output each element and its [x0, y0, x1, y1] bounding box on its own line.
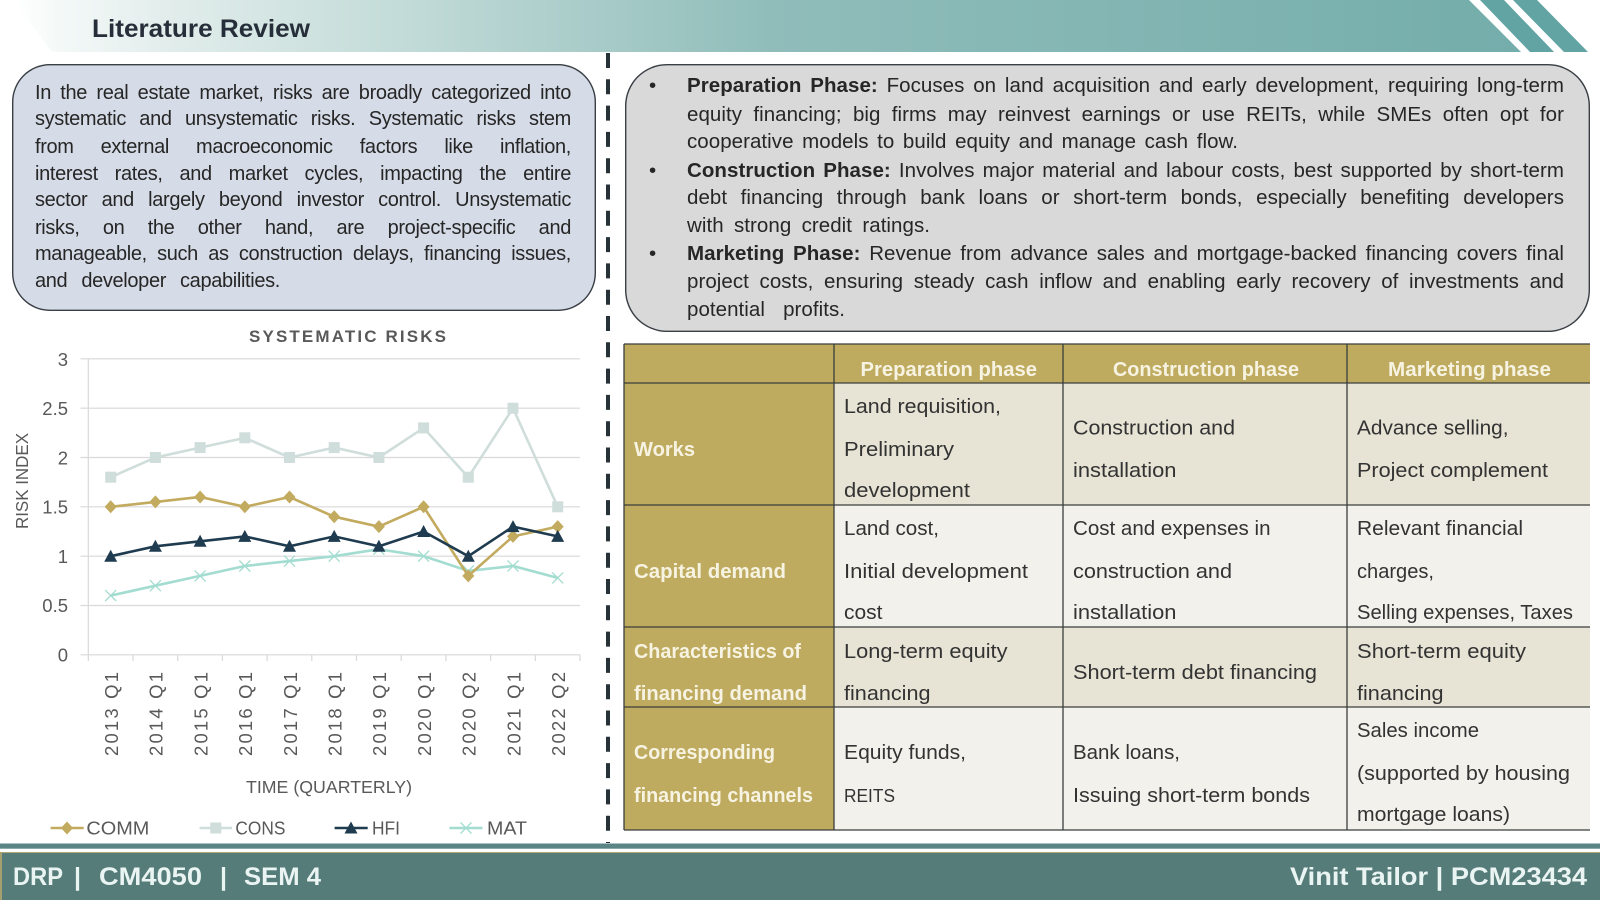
- table row labels: Characteristics of: [634, 641, 801, 663]
- panel: risk categories: risks, on the other hand, are project-specific and: [35, 216, 571, 238]
- x axis tick labels: 2014 Q1: [146, 672, 167, 756]
- y axis tick labels: [42, 349, 68, 666]
- table column: marketing phase: mortgage loans): [1357, 804, 1510, 826]
- table column: preparation phase: Initial development: [844, 561, 1028, 583]
- table column: preparation phase: Equity funds,: [844, 742, 966, 764]
- financing table: [624, 344, 1590, 830]
- x axis title: TIME (QUARTERLY): [246, 777, 412, 797]
- table column: marketing phase: financing: [1357, 683, 1444, 705]
- x axis tick labels: [101, 672, 569, 756]
- header stripe 2: [1513, 0, 1588, 52]
- x axis tick labels: 2020 Q1: [414, 672, 435, 756]
- table column: marketing phase: Short-term equity: [1357, 641, 1526, 663]
- table column: marketing phase: (supported by housing: [1357, 763, 1570, 785]
- x axis tick labels: 2022 Q2: [548, 672, 569, 756]
- panel: risk categories: systematic and unsystematic risks. Systematic risks stem: [35, 108, 571, 130]
- panel: risk categories: [12, 64, 596, 311]
- x axis tick labels: 2013 Q1: [101, 672, 122, 756]
- panel: risk categories: manageable, such as construction delays, financing issues,: [35, 243, 571, 265]
- table column: construction phase: installation: [1073, 460, 1176, 482]
- table column: preparation phase: Land requisition,: [844, 396, 1001, 418]
- y axis tick labels: 0: [58, 644, 68, 666]
- table row labels: Works: [634, 439, 695, 461]
- footer left text: [13, 863, 321, 891]
- table column: preparation phase: Land cost,: [844, 518, 939, 540]
- panel: project phases: with strong credit ratings.: [687, 214, 930, 236]
- y axis tick labels: 2: [58, 448, 68, 468]
- y axis tick labels: 0.5: [42, 595, 68, 616]
- y axis tick labels: 3: [58, 349, 68, 370]
- line chart: systematic risks: [12, 327, 580, 838]
- panel: risk categories: from external macroeconomic factors like inflation,: [35, 136, 571, 158]
- legend: MAT: MAT: [487, 818, 527, 838]
- table column: preparation phase: Long-term equity: [844, 641, 1008, 663]
- table column: preparation phase: cost: [844, 602, 883, 624]
- table row labels: financing channels: [634, 785, 813, 807]
- x axis tick labels: 2016 Q1: [235, 672, 256, 756]
- footer left text: |: [220, 863, 227, 891]
- legend: HFI: HFI: [372, 818, 400, 838]
- series: CONS: [111, 408, 558, 507]
- series: HFI: [111, 527, 558, 556]
- table header row: [860, 359, 1551, 381]
- footer left text: DRP: [13, 863, 63, 891]
- panel: risk categories: In the real estate market, risks are broadly categorized into: [35, 82, 571, 104]
- panel: project phases: equity financing; big firms may reinvest earnings or use REITs, while SMEs often opt for: [687, 102, 1564, 126]
- table column: marketing phase: Project complement: [1357, 460, 1548, 482]
- y axis tick labels: 1: [58, 546, 68, 567]
- table column: preparation phase: financing: [844, 683, 930, 705]
- table header row: Preparation phase: [860, 359, 1037, 381]
- panel: risk categories: sector and largely beyond investor control. Unsystematic: [35, 189, 571, 211]
- table row labels: Corresponding: [634, 742, 775, 764]
- panel: project phases: cooperative models to build equity and manage cash flow.: [687, 130, 1238, 152]
- table column: construction phase: Issuing short-term bonds: [1073, 785, 1310, 807]
- table column: construction phase: construction and: [1073, 561, 1232, 583]
- table column: marketing phase: Selling expenses, Taxes: [1357, 602, 1573, 624]
- legend: MAT: [449, 818, 527, 838]
- panel: project phases: •: [649, 74, 656, 97]
- legend: HFI: [335, 818, 400, 838]
- legend: COMM: COMM: [86, 818, 149, 838]
- table column: construction phase: Cost and expenses in: [1073, 518, 1270, 540]
- panel: project phases: project costs, ensuring steady cash inflow and enabling early recovery of investments and: [687, 270, 1564, 292]
- panel: project phases: Preparation Phase: Focuses on land acquisition and early development, requiring long-term: [687, 74, 1564, 97]
- table column: marketing phase: Advance selling,: [1357, 418, 1508, 440]
- table column: construction phase: Short-term debt financing: [1073, 662, 1317, 684]
- series: MAT: [111, 549, 558, 596]
- footer left text: CM4050: [99, 863, 202, 891]
- title: Literature Review: [92, 15, 311, 43]
- header banner: [14, 0, 1588, 52]
- table column: preparation phase: REITS: [844, 785, 895, 806]
- panel: project phases: debt financing through bank loans or short-term bonds, especially benefiting developers: [687, 186, 1564, 208]
- table column: marketing phase: charges,: [1357, 561, 1434, 583]
- table header row: Marketing phase: [1388, 359, 1551, 381]
- y axis tick labels: 1.5: [42, 496, 68, 518]
- x axis tick labels: 2019 Q1: [369, 672, 390, 756]
- footer left text: |: [74, 863, 81, 891]
- panel: project phases: [625, 64, 1590, 332]
- table row labels: Capital demand: [634, 561, 786, 583]
- panel: project phases: •: [649, 242, 656, 265]
- footer bar: [0, 844, 1600, 900]
- table row labels: [634, 439, 813, 807]
- table column: marketing phase: Sales income: [1357, 720, 1479, 742]
- legend: CONS: CONS: [235, 818, 285, 838]
- panel: project phases: •: [649, 158, 656, 182]
- legend: CONS: [200, 818, 285, 838]
- table column: marketing phase: Relevant financial: [1357, 518, 1523, 540]
- x axis tick labels: 2018 Q1: [324, 672, 346, 756]
- legend: COMM: [51, 818, 149, 838]
- table column: marketing phase: [1357, 418, 1573, 826]
- panel: risk categories: and developer capabilities.: [35, 270, 280, 292]
- table header row: Construction phase: [1113, 359, 1299, 381]
- panel: project phases: Marketing Phase: Revenue from advance sales and mortgage-backed financing covers final: [687, 242, 1564, 265]
- table column: preparation phase: development: [844, 480, 970, 502]
- footer right text: Vinit Tailor | PCM23434: [1290, 863, 1587, 891]
- y axis tick labels: 2.5: [42, 398, 68, 419]
- x axis tick labels: 2021 Q1: [503, 672, 524, 756]
- legend: [51, 818, 527, 838]
- dashed divider: [606, 53, 610, 843]
- table row labels: financing demand: [634, 683, 807, 705]
- panel: project phases: potential profits.: [687, 298, 845, 321]
- header stripe 1: [1480, 0, 1554, 52]
- panel: project phases: Construction Phase: Involves major material and labour costs, best supported by short-term: [687, 158, 1564, 182]
- x axis tick labels: 2017 Q1: [280, 672, 301, 756]
- table column: construction phase: [1073, 418, 1317, 807]
- table column: construction phase: installation: [1073, 602, 1176, 624]
- footer left text: SEM 4: [244, 863, 321, 891]
- table column: preparation phase: [844, 396, 1028, 806]
- x axis tick labels: 2015 Q1: [190, 672, 211, 756]
- chart title: SYSTEMATIC RISKS: [249, 327, 446, 346]
- y axis title: RISK INDEX: [12, 433, 32, 529]
- table column: preparation phase: Preliminary: [844, 439, 954, 461]
- table column: construction phase: Bank loans,: [1073, 742, 1180, 764]
- x axis tick labels: 2020 Q2: [459, 672, 480, 756]
- series: COMM: [111, 497, 558, 576]
- table column: construction phase: Construction and: [1073, 418, 1235, 440]
- panel: risk categories: interest rates, and market cycles, impacting the entire: [35, 162, 571, 184]
